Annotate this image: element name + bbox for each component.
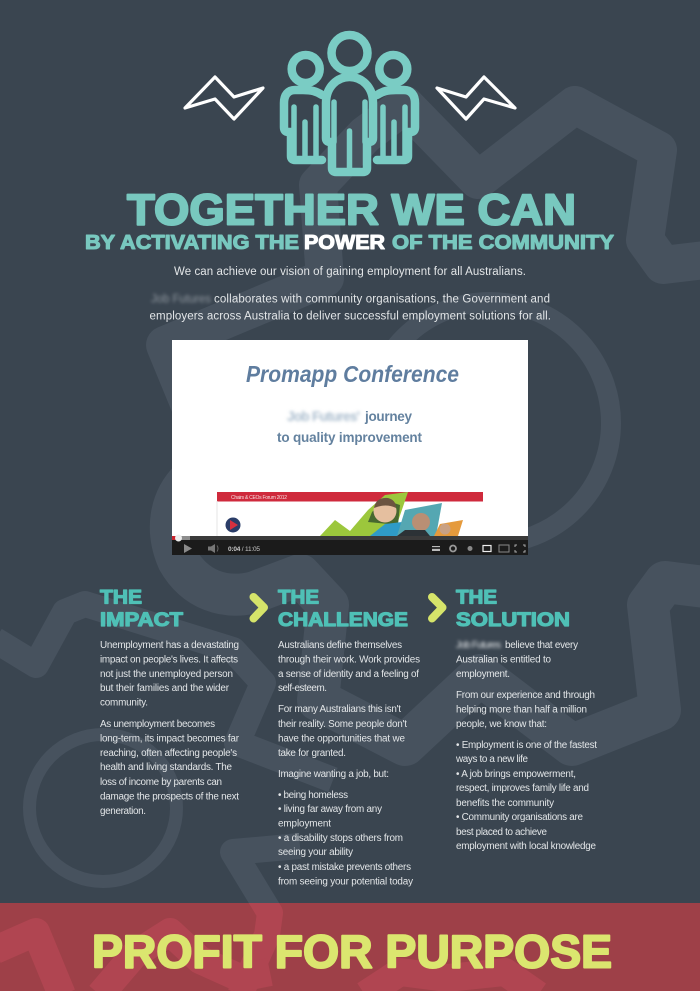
intro text: We can achieve our vision of gaining employment for all Australians. [174,266,526,278]
body text: the solution: From our experience and through [456,690,595,701]
body text: the challenge: Imagine wanting a job, but: [278,769,389,780]
body text: the solution: • A job brings empowerment, [456,769,576,780]
body text: the challenge: take for granted. [278,748,346,759]
video player [172,340,528,555]
title: TOGETHER WE CAN [127,186,576,234]
heading: the challenge: CHALLENGE [278,609,408,631]
intro text: employers across Australia to deliver successful employment solutions for all. [150,310,551,322]
body text: the solution: helping more than half a million [456,704,587,716]
heading: the solution: THE [456,586,497,608]
body text: the challenge: have the opportunities that we [278,734,406,744]
body text: the solution: Australian is entitled to [456,654,552,666]
heading: the solution [456,586,570,631]
body text: the solution: employment. [456,669,510,680]
body text: the impact: community. [100,698,148,708]
body text: the impact: Unemployment has a devastating [100,640,239,651]
body text: the solution: employment with local knowledge [456,841,596,852]
body text: the impact [100,640,240,817]
body text: the challenge: • a disability stops others from [278,833,403,844]
body text: the solution [455,640,597,852]
heading: the impact [100,586,183,631]
body text: the solution: • Community organisations are [456,812,584,823]
body text: the solution: benefits the community [456,798,554,809]
body text: the impact: loss of income by parents can [100,777,222,788]
heading: the challenge [278,586,408,631]
body text: the solution: respect, improves family life and [456,783,589,794]
body text: the impact: long-term, its impact becomes far [100,734,240,744]
body text: the impact: reaching, often affecting people's [100,748,237,759]
body text: the challenge: seeing your ability [278,847,353,858]
body text: the challenge: employment [278,818,331,830]
body text: the impact: health and living standards. The [100,762,232,773]
subtitle: OF THE COMMUNITY [392,232,615,254]
body text: the challenge: • being homeless [278,790,348,801]
icon: left lightning bolt [185,77,263,119]
body text: the challenge: a sense of identity and a feeling of [278,669,419,680]
panel: the challenge [278,586,420,888]
player controls [172,534,528,555]
body text: the challenge: For many Australians this isn't [278,704,401,715]
icon: right lightning bolt [437,77,515,119]
body text: the impact: but their families and the wider [100,683,230,694]
footer heading: PROFIT FOR PURPOSE [92,926,612,978]
body text: the challenge: Australians define themselves [278,640,402,651]
body text: the challenge: self-esteem. [278,683,327,694]
body text: the challenge [278,640,420,888]
heading: the impact: IMPACT [100,609,183,631]
body text: the solution: Job Futures [456,640,501,651]
body text: the challenge: • living far away from any [278,804,382,815]
arrow: impact to challenge [254,597,264,618]
slide subheading: journey [364,409,412,424]
player controls: 0:04 / 11:05 [228,546,260,553]
body text: the impact: not just the unemployed person [100,669,233,680]
body text: the impact: As unemployment becomes [100,719,215,730]
panel: the solution [455,586,597,852]
body text: the solution: best placed to achieve [456,827,548,838]
heading: the impact: THE [100,586,142,608]
body text: the challenge: through their work. Work provides [278,654,420,666]
icon: three people [284,35,415,172]
footer band [0,903,700,991]
intro text: Job Futures [151,294,211,306]
subtitle [85,232,615,254]
subtitle: POWER [304,232,386,254]
body text: the solution: ways to a new life [455,754,528,765]
slide subheading: to quality improvement [277,430,422,445]
panel: the impact [100,586,240,817]
body text: the challenge: their reality. Some people don't [278,719,407,730]
body text: the impact: generation. [100,806,146,817]
arrow: challenge to solution [432,597,442,618]
slide subheading [277,409,422,445]
body text: the solution: believe that every [505,640,578,651]
intro text [150,266,551,322]
body text: the solution: people, we know that: [456,719,547,730]
body text: the impact: damage the prospects of the next [100,792,239,802]
intro text: collaborates with community organisations, the Government and [214,294,550,306]
slide heading: Promapp Conference [246,361,459,387]
heading: the solution: SOLUTION [456,609,570,631]
body text: the solution: • Employment is one of the fastest [456,740,597,751]
body text: the challenge: from seeing your potential today [278,876,413,888]
slide thumbnail [216,492,483,536]
body text: the impact: impact on people's lives. It affects [100,654,238,666]
slide subheading: Job Futures' [287,409,360,424]
slide thumbnail: Chairs & CEOs Forum 2012 [231,495,287,501]
heading: the challenge: THE [278,586,319,608]
subtitle: BY ACTIVATING THE [85,232,299,254]
body text: the challenge: • a past mistake prevents others [278,862,411,873]
